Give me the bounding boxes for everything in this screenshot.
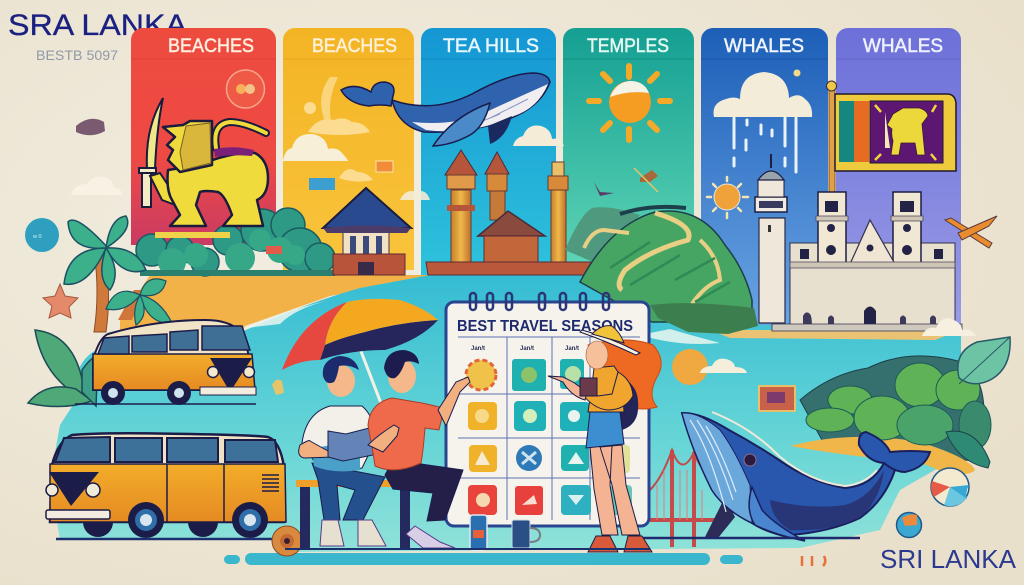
calendar [446, 293, 649, 526]
whale: large [682, 412, 930, 541]
icon: sun [589, 66, 670, 140]
icon: pie ball [931, 468, 969, 506]
cloud: left margin [71, 177, 123, 195]
phone and mug [470, 515, 540, 550]
woman with hat and backpack [548, 326, 661, 552]
icon: palm tree left [64, 216, 146, 332]
harbor foliage under hill [650, 303, 758, 334]
tower one [445, 150, 477, 262]
panel: green temples: TEMPLES [587, 36, 669, 57]
tower three [548, 162, 568, 262]
people on bench [282, 299, 470, 549]
icon: pavilion [323, 188, 411, 275]
icon: big leaf [958, 337, 1010, 384]
icon: propeller [945, 216, 997, 248]
flag lion [887, 108, 928, 155]
panel: red beaches [131, 28, 276, 245]
legs [590, 445, 640, 535]
icon: white cloud [283, 134, 348, 161]
hair [588, 340, 661, 409]
icon: flower [43, 284, 78, 318]
tower two [485, 152, 509, 220]
small flag on sea [759, 386, 795, 411]
calendar title: BEST TRAVEL SEASONS [457, 318, 633, 335]
calendar cell icons [466, 359, 632, 515]
trees [136, 208, 335, 276]
panel: red beaches: BEACHES [168, 36, 254, 57]
icon: pale clouds and sun haze [304, 77, 373, 182]
icon: leaves left [28, 330, 98, 407]
sea sun and cloud [672, 349, 747, 385]
icon: small palm [106, 279, 172, 325]
bench [296, 480, 440, 549]
central temple [478, 211, 545, 236]
panel: purple whales: WHALES [863, 36, 943, 57]
icon: small sign [376, 161, 393, 172]
title: SRA LANKA: SRA LANKA [8, 9, 187, 42]
panel: blue tea hills [421, 28, 556, 275]
panel: blue tea hills: TEA HILLS [443, 36, 539, 57]
saddle [214, 147, 254, 157]
column labels: Jan/t [520, 346, 534, 352]
smudge icon: left margin [76, 119, 105, 135]
sand strip below church [710, 330, 960, 340]
icon: rain cloud [714, 70, 812, 172]
column labels [471, 346, 579, 352]
decorative red marks [802, 556, 825, 566]
subtitle: BESTB 5097 [36, 48, 118, 63]
lion body [168, 153, 268, 226]
column labels: Jan/t [565, 346, 579, 352]
lion head [163, 121, 212, 172]
icon: blue circle badge [25, 218, 59, 252]
sword [139, 98, 163, 207]
icon: temple group [426, 150, 591, 275]
man two [368, 350, 470, 548]
guidebook [580, 378, 597, 396]
top [588, 366, 624, 412]
column labels: Jan/t [471, 346, 485, 352]
icon: small boat [309, 178, 335, 190]
icon: small sun [707, 177, 748, 218]
shorts [586, 412, 624, 448]
panel: blue whales: WHALES [724, 36, 804, 57]
surf line [246, 300, 720, 344]
small van [75, 320, 256, 405]
panel: yellow beaches: BEACHES [312, 36, 397, 57]
tea hill [565, 207, 752, 322]
icon: sun clouds bits [400, 191, 430, 200]
calendar rings [470, 293, 609, 310]
sandals [588, 536, 652, 552]
flag pole [826, 81, 836, 198]
panel: purple whales [836, 28, 961, 330]
umbrella [282, 299, 438, 419]
lion tail [215, 122, 266, 148]
ground line [285, 548, 650, 550]
icon: small cloud by church [922, 318, 976, 336]
lion arm [150, 173, 182, 206]
panel: blue whales [701, 28, 828, 330]
church [772, 192, 962, 331]
backpack [612, 372, 638, 430]
sand beach [120, 275, 440, 345]
island [790, 356, 991, 474]
icon: sri lanka lion [139, 98, 268, 226]
calendar grid [458, 337, 640, 520]
sri lanka label: SRI LANKA [880, 544, 1017, 574]
panel: green temples [563, 28, 694, 280]
icon: birds [594, 168, 658, 196]
large van [46, 433, 290, 539]
icon: small ball [896, 512, 922, 538]
face [586, 341, 608, 369]
bridge [650, 450, 720, 547]
pointing arm [548, 376, 587, 400]
floor strip [224, 553, 743, 565]
small colour dots on sea [272, 380, 284, 395]
temple base [426, 262, 591, 275]
icon: blue circle badge: ᴡ 0 [32, 234, 42, 240]
hat [580, 326, 640, 355]
lion mane [180, 123, 211, 170]
panel: yellow beaches [283, 28, 414, 270]
icon: small cloud over blue panel [513, 125, 564, 146]
icon: round wheel [272, 526, 302, 556]
man one [299, 356, 386, 546]
icon: red panel badge [226, 70, 264, 108]
sri lanka flag [835, 94, 956, 171]
lighthouse [755, 154, 787, 323]
ground line under whale [640, 537, 860, 539]
sea [50, 275, 961, 552]
whale: flying [341, 73, 550, 146]
